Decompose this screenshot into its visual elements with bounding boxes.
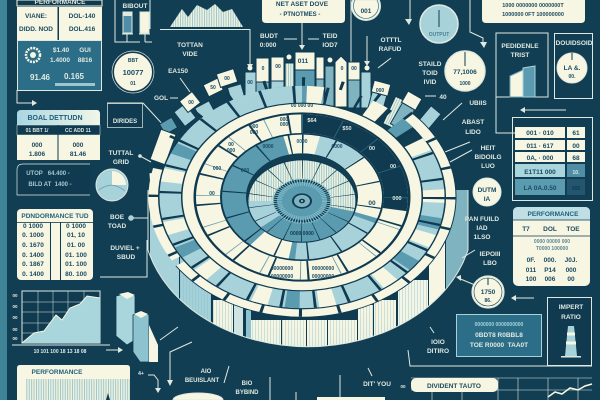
wheel cylinder: [148, 52, 468, 348]
label: heit holding: HEIT: [481, 145, 495, 152]
wheel segment labels: 000: [280, 122, 288, 128]
panel: right performance: TOE: [566, 226, 580, 233]
chart: line area: 10 101 100 18 13 18 08: [34, 349, 87, 355]
label: other ratio: RAFUD: [379, 46, 402, 53]
connector: stats card to dividend box: [17, 90, 166, 128]
panel: teal note: 0000000 0000000000: [475, 322, 524, 328]
panel: mid-left performance table: 01, 10: [67, 232, 85, 239]
label: bio: BIO: [242, 381, 253, 387]
icon: pie chart: [96, 169, 128, 201]
wheel segment labels: [209, 103, 402, 280]
panel: right table: LA 0A.0.50: [524, 185, 557, 192]
label: budget: 0:000: [260, 42, 277, 49]
chart: line area: 00: [12, 293, 18, 298]
label: stable total: IVID: [424, 79, 437, 86]
panel: goal return table: 1.806: [29, 151, 46, 158]
panel: dividend ratio title: DIVIDENT TAUTO: [427, 383, 481, 390]
panel: right table: E1T11 000: [524, 169, 556, 176]
panel: teal note: 0BDT8 R0BBL8: [475, 332, 523, 339]
connector with arrow: to performance box: [470, 0, 487, 48]
ring: teal segments: [206, 122, 398, 272]
arrow: callout to wheel: [299, 23, 305, 50]
label: heit holding: [445, 142, 502, 170]
panel: right table: 001 · 010: [526, 130, 554, 137]
label: 00 small: 00: [400, 384, 406, 389]
callout: circular total: BBT: [128, 58, 138, 64]
label: other ratio: [378, 37, 402, 68]
label: teid: IOD7: [322, 42, 338, 49]
wheel segment labels: 00000000: [312, 274, 334, 280]
arrow: to right table: [520, 107, 566, 113]
label: asset: LIDO: [465, 129, 481, 136]
wheel segment labels: 0000: [262, 144, 274, 150]
block labels and dots: 50: [210, 85, 216, 91]
wheel segment labels: 0000: [331, 144, 343, 150]
callout: circle 1750: 86.: [485, 298, 492, 304]
label: total dividend: IOIO: [431, 339, 445, 346]
panel: mid-left performance table: 0. 1000: [22, 232, 44, 239]
label: budget: BUDT: [260, 33, 278, 40]
arrow: circle to wheel: [364, 36, 370, 66]
chart: line area: 00: [12, 315, 18, 320]
block labels and dots: [188, 54, 384, 106]
panel: right performance: 0F.: [527, 257, 536, 264]
label: boe total: TOAD: [108, 223, 126, 230]
label: and dividend: BEUISLANT: [185, 378, 219, 384]
wheel segment labels: 00: [390, 164, 396, 170]
label: budget: [260, 33, 297, 49]
block labels and dots: 0: [341, 66, 344, 72]
wheel segment labels: 000: [227, 148, 235, 154]
callout: duty circle: DUTM: [478, 187, 496, 194]
panel: right performance: 006: [545, 276, 556, 283]
connectors: bars to wheel: [160, 327, 192, 380]
label: pan field: PAN FUILD: [465, 216, 499, 223]
callout: bottom ellipse: [173, 393, 223, 400]
box: bottom center card: [317, 397, 385, 400]
panel: goal return table: 81.46: [70, 151, 87, 158]
callout: circular 77,000: [445, 51, 485, 91]
panel: right table: 005: [572, 186, 580, 192]
box: dividend note: DIRIDES: [113, 119, 137, 125]
panel: mid-left performance table: 0. 1400: [22, 252, 44, 259]
wheel segment labels: 000: [280, 117, 288, 123]
label: total grid: [109, 150, 151, 166]
label: iepoii: [480, 251, 501, 267]
callout: top-right description: 1000000 0FT 100000000: [502, 12, 564, 18]
connector with arrow: top to gauge: [405, 0, 412, 25]
label: teid: TEID: [323, 33, 338, 40]
connector: [100, 240, 147, 277]
box: dark stat list: UTOP 64.400 -: [26, 171, 70, 177]
panel: dividend circle box: DOUIDSOID: [556, 40, 593, 47]
callout: net asset value: - PTNOTMES -: [280, 12, 320, 18]
wheel segment labels: 0000: [296, 139, 308, 145]
label: teid: [308, 33, 338, 49]
arrow: mountain to wheel: [247, 29, 253, 69]
arrow: [106, 347, 123, 353]
panel: mid-left performance table: 80. 100: [65, 271, 87, 278]
label with arrow: [138, 371, 161, 393]
panel: expert ratio cone: IMPERT: [559, 304, 583, 311]
left edge stripe: [0, 0, 7, 400]
panel: right performance: T0000 100000: [536, 246, 568, 252]
chart: line area: 00: [12, 327, 18, 332]
core: [275, 180, 329, 222]
panel: goal return table: 01 BBT 1/: [26, 128, 49, 134]
panel: goal return table: [17, 110, 100, 160]
wheel segment labels: 00000000: [271, 266, 293, 272]
panel: right performance: 000: [566, 267, 577, 274]
top and side blocks behind the rings: [159, 52, 441, 135]
icon: gauge: [420, 5, 458, 43]
label: total dividend: DITIRO: [427, 348, 449, 355]
label: boe total: [108, 214, 149, 230]
arrow: [32, 100, 37, 106]
callout: top circle: [351, 0, 380, 85]
panel: top-left performance table: DIDD. NOD: [19, 26, 53, 33]
arrow: to circle: [511, 295, 534, 301]
connectors: bottom center: [270, 375, 340, 400]
wheel segment labels: $64: [307, 118, 318, 124]
panel: top-left performance table: VIANE:: [25, 13, 47, 20]
ring: cream rim: [188, 108, 416, 286]
panel: right performance: T7: [522, 226, 530, 233]
label: other ratio: OTTTL: [381, 37, 401, 44]
panel: teal stats card: 0.165: [64, 72, 85, 81]
wheel segment labels: $50: [342, 126, 352, 132]
label: bio: BYBIND: [235, 390, 259, 396]
panel: right table: 011 · 617: [526, 143, 554, 150]
label with arrow: 4+: [138, 371, 144, 377]
wheel segment labels: 000: [241, 168, 249, 174]
panel: right performance: 000.: [544, 257, 557, 264]
panel: dividend circle box: [554, 34, 593, 98]
wheel segment labels: 00: [228, 142, 234, 148]
callout: net asset value: [262, 0, 345, 23]
panel: right performance: PERFORMANCE: [528, 211, 579, 218]
label: total view: [177, 42, 203, 58]
panel: mid-left performance table: 01. 100: [65, 252, 87, 259]
block labels and dots: 00: [247, 80, 253, 86]
panel: bottom-left performance: PERFORMANCE: [32, 369, 83, 376]
label: heit holding: BIDOILG: [474, 154, 502, 161]
panel: right performance: [513, 207, 590, 286]
cylinder wall: [148, 190, 468, 348]
panel: performance trust box: TRIST: [511, 52, 529, 59]
panel: teal stats card: 8816: [78, 57, 93, 64]
label: total grid: GRID: [113, 159, 129, 166]
panel: top-left performance table: [17, 0, 102, 40]
chart: small bars with frame: BIBOUT: [123, 3, 147, 10]
wheel segment labels: 000: [250, 130, 258, 136]
icon: gear: [26, 48, 40, 62]
label: did you: DIT' YOU: [363, 381, 391, 388]
wheel segment labels: 000: [392, 196, 402, 202]
label: heit holding: LUO: [481, 163, 495, 170]
label: right side panel connector: [458, 250, 475, 285]
panel: mid-left performance table: PDNDORMANCE TUD: [21, 213, 89, 220]
callout: duty circle: [473, 178, 501, 206]
label: units: UBIIS: [469, 100, 487, 107]
panel: right performance: 00: [567, 276, 575, 283]
panel: mid-left performance table: 0 1000: [66, 223, 86, 230]
panel: dividend circle box: 00.: [569, 74, 576, 80]
connector: wall to bottom: [408, 350, 592, 366]
ring: outer cream tabs, right side through bottom: [93, 34, 511, 360]
panel: goal return table: CC ADD 11: [65, 128, 91, 134]
label: did you: [363, 368, 391, 388]
ring: outer light blocks: [120, 55, 484, 339]
label: stable total: STAILD: [418, 61, 442, 68]
label: bio: [224, 366, 259, 396]
label: boe total: BOE: [110, 214, 125, 221]
icon: gauge: OUTPUT: [429, 32, 449, 38]
panel: mid-left performance table: 0 1000: [23, 223, 43, 230]
block labels and dots: 000: [376, 88, 384, 94]
panel: teal note: TOE R0000 TAA0T: [470, 342, 528, 349]
panel: goal return table: 000: [73, 142, 84, 149]
callout: net asset value: NET ASET DOVE: [276, 1, 329, 8]
label: 40: 40: [439, 94, 447, 101]
arrowhead: [456, 275, 461, 281]
label: total dividend: [427, 327, 449, 355]
block labels and dots: 00: [275, 64, 281, 70]
callout: circular 77,000: 77,1006: [453, 69, 477, 76]
chart: 3D bars: [116, 292, 158, 362]
panel: right table: 10.: [573, 170, 580, 176]
panel: teal stats card: 91.46: [30, 73, 51, 82]
panel: goal return table: 000: [32, 142, 43, 149]
panel: dividend circle box: LA &.: [564, 65, 581, 72]
panel: mid-left performance table: 0. 1670: [22, 242, 44, 249]
chart: line area: 00: [12, 304, 18, 309]
panel: right table: 68: [572, 155, 580, 162]
block labels and dots: 00: [188, 100, 194, 106]
chart: line area: [12, 291, 110, 355]
panel: right table: [512, 118, 592, 200]
callout: circular 77,000: 1000: [459, 81, 471, 87]
panel: mid-left performance table: 01. 100: [65, 261, 87, 268]
wheel segment labels: 00000000: [271, 274, 293, 280]
chart: small bars with frame: [115, 0, 152, 42]
box: dark stat list: BILD AT 1400 -: [28, 182, 72, 188]
panel: top-left performance table: DOL.416: [69, 26, 96, 33]
label: gol: GOL: [154, 95, 168, 102]
label: gol: [154, 95, 178, 102]
chart: line area: 00: [12, 336, 18, 341]
label: units: [443, 100, 487, 120]
wheel segment labels: 0000 0000: [290, 231, 314, 237]
panel: right table: 00: [572, 143, 580, 150]
wheel segment labels: 00: [368, 200, 376, 207]
label: duvial shared: [110, 245, 140, 261]
box: dividend note: [108, 104, 142, 128]
panel: right performance: 100: [526, 276, 537, 283]
panel: dividend ratio title: [411, 378, 498, 392]
panel: right performance: DOL: [543, 226, 557, 233]
box: dark stat list: [17, 164, 90, 195]
panel: right performance: J0J.: [565, 257, 578, 264]
label: pan field: 1LSO: [474, 234, 490, 241]
side tabs: left: [149, 129, 176, 205]
wheel segment labels: 000: [250, 124, 258, 130]
wheel segment labels: 00000000: [312, 266, 334, 272]
label: ea150: [168, 68, 190, 92]
block labels and dots: 00: [351, 66, 357, 72]
wheel rings: [188, 108, 416, 286]
panel: mid-left performance table: 0. 1867: [22, 261, 44, 268]
block labels and dots: 00: [224, 76, 230, 82]
block labels and dots: 0: [262, 66, 265, 72]
panel: teal stats card: GUI: [79, 47, 91, 54]
panel: mid-left performance table: 01. 00: [67, 242, 85, 249]
wheel segment labels: 00: [209, 191, 215, 197]
panel: performance trust box: [496, 33, 548, 133]
callout: top circle: 001: [361, 8, 372, 15]
callout: top-right description: [482, 0, 585, 23]
label: stable total: [418, 61, 442, 86]
label: and dividend: AIO: [201, 369, 212, 375]
label: asset: [462, 119, 484, 136]
label: total view: VIDE: [182, 51, 198, 58]
panel: expert ratio cone: RATIO: [561, 314, 581, 321]
panel: top-left performance table: DOL-140: [69, 13, 96, 20]
panel: right performance: 0000 00000 000: [534, 239, 570, 245]
arrow: [167, 380, 173, 386]
label: total view: TOTTAN: [177, 42, 203, 49]
panel: right table: 0A, · 000: [527, 155, 554, 162]
panel: teal note: [456, 314, 542, 356]
panel: teal stats card: 1.4000: [50, 57, 70, 64]
panel: right performance: 011: [526, 267, 537, 274]
panel: mid-left performance table: [17, 209, 93, 280]
wheel segment labels: 00: [369, 146, 375, 152]
label: total grid: TUTTAL: [109, 150, 133, 157]
label: iepoii: LBO: [483, 260, 497, 267]
panel: right table: 61: [572, 130, 580, 137]
callout: circular total: 01: [130, 81, 136, 87]
chart: dividend grid with line: [411, 378, 592, 400]
callout: circular total: 10077: [123, 68, 143, 77]
label: pan field: IAD: [476, 225, 488, 232]
label: iepoii: IEPOIII: [480, 251, 501, 258]
callout: circle 1750: 1750: [481, 289, 496, 296]
label: stable total: TOID: [422, 70, 438, 77]
block labels and dots: 011: [298, 58, 309, 65]
panel: goal return table: BOAL DETTUDN: [27, 115, 83, 122]
label: asset: ABAST: [462, 119, 484, 126]
panel: teal stats card: $1.40: [53, 47, 70, 54]
panel: expert ratio cone: [548, 298, 592, 366]
label: pan field: [465, 216, 499, 241]
callout: top-right description: 1000 0000000 0000000T: [502, 3, 564, 9]
ring: hatched inner: [244, 157, 360, 245]
label: duvial shared: SBUD: [117, 254, 136, 261]
panel: right performance: P14: [544, 267, 556, 274]
chart: mountain area: [160, 4, 250, 30]
label: duvial shared: DUVIEL +: [110, 245, 140, 252]
panel: teal stats card: [18, 40, 102, 90]
panel: bottom-left performance: [17, 365, 130, 400]
label: 40: [425, 94, 447, 101]
callout: circular total: [112, 51, 154, 93]
icon: building bars: [510, 66, 535, 97]
callout: duty circle: IA: [484, 196, 491, 203]
icon: cone: [561, 326, 581, 358]
label: ea150: EA150: [168, 68, 188, 75]
label: and dividend: [185, 369, 219, 384]
wheel segment labels: 000: [213, 166, 221, 172]
ring: cream and dark segments: [208, 124, 396, 270]
callout: circle 1750: [472, 276, 504, 308]
wheel segment labels: 00 000 00: [291, 103, 313, 109]
panel: performance trust box: PEDIDENLE: [501, 43, 539, 50]
panel: mid-left performance table: 0. 1400: [22, 271, 44, 278]
